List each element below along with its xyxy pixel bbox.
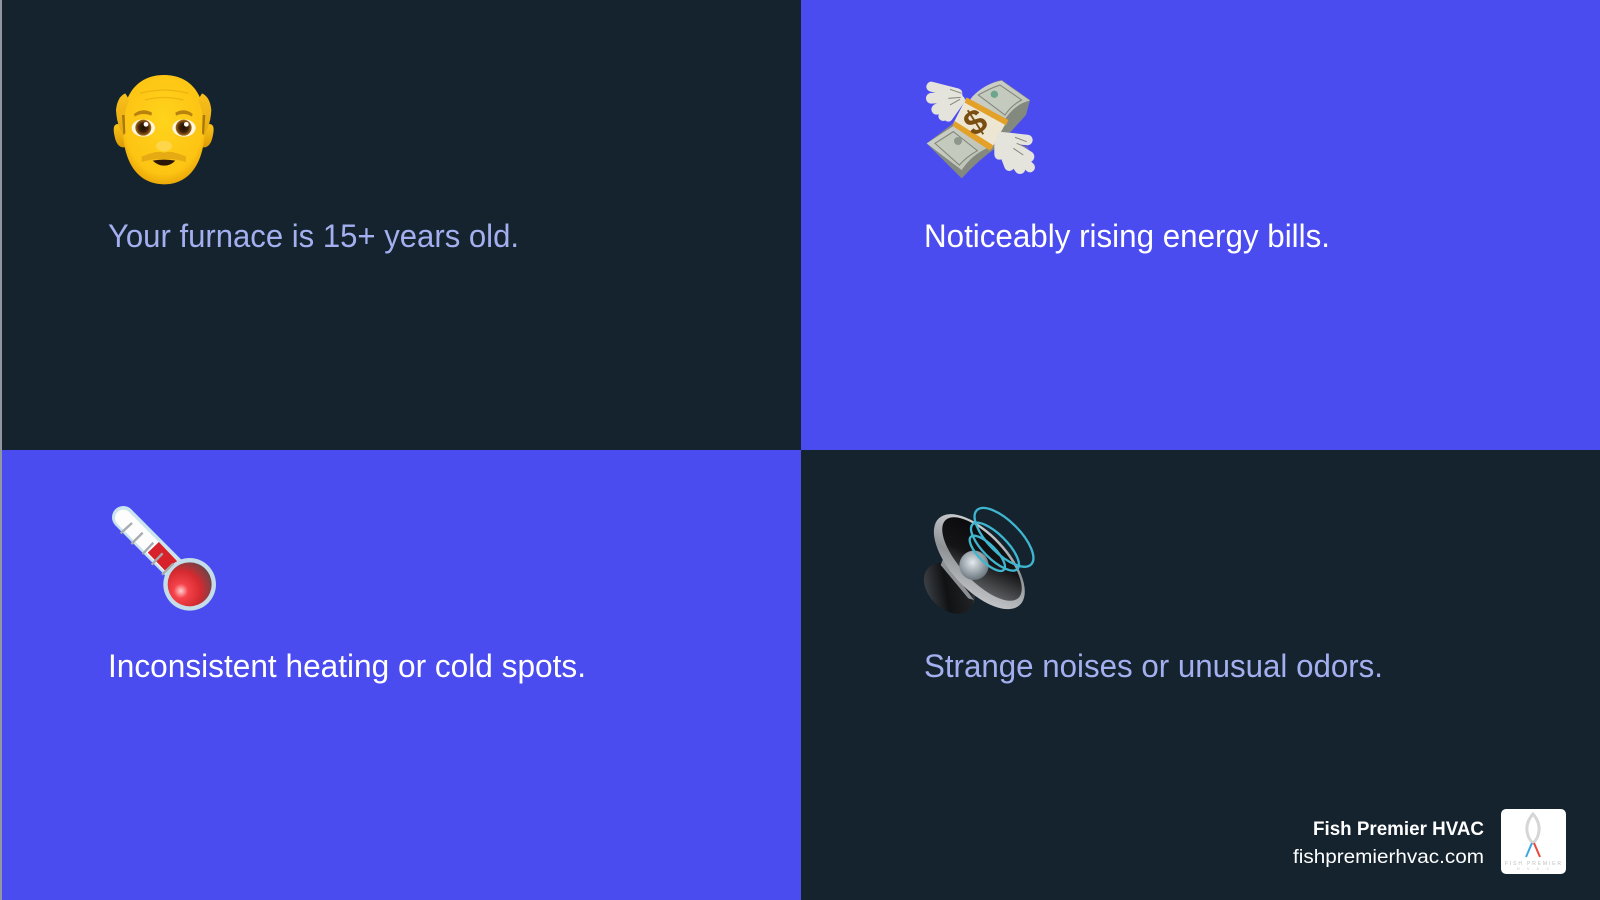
logo xyxy=(1501,809,1566,874)
panel: furnace age background xyxy=(2,0,801,450)
left edge strip xyxy=(0,0,2,900)
text: noises: Strange noises or unusual odors. xyxy=(924,648,1383,684)
text: furnace age: Your furnace is 15+ years old. xyxy=(108,218,519,254)
icon: thermometer emoji xyxy=(121,517,216,611)
text: energy bills: Noticeably rising energy bills. xyxy=(924,218,1330,254)
icon: money with wings emoji xyxy=(927,80,1030,178)
logo: FISH PREMIER xyxy=(1505,861,1561,867)
logo: H-V-A-C xyxy=(1517,867,1549,871)
brand url: fishpremierhvac.com xyxy=(1293,846,1484,868)
bills stack xyxy=(927,80,1030,178)
paper band xyxy=(953,98,1007,148)
panel: heating background xyxy=(2,450,801,900)
left wing xyxy=(931,87,961,117)
icon: speaker emoji xyxy=(914,499,1042,624)
panel: energy bills background xyxy=(801,0,1600,450)
panel: noises background xyxy=(801,450,1600,900)
brand name: Fish Premier HVAC xyxy=(1313,819,1484,840)
dollar sign: $ xyxy=(957,101,994,144)
text: heating: Inconsistent heating or cold spots. xyxy=(108,648,586,684)
icon: old man emoji xyxy=(114,75,214,184)
right wing xyxy=(999,137,1030,169)
